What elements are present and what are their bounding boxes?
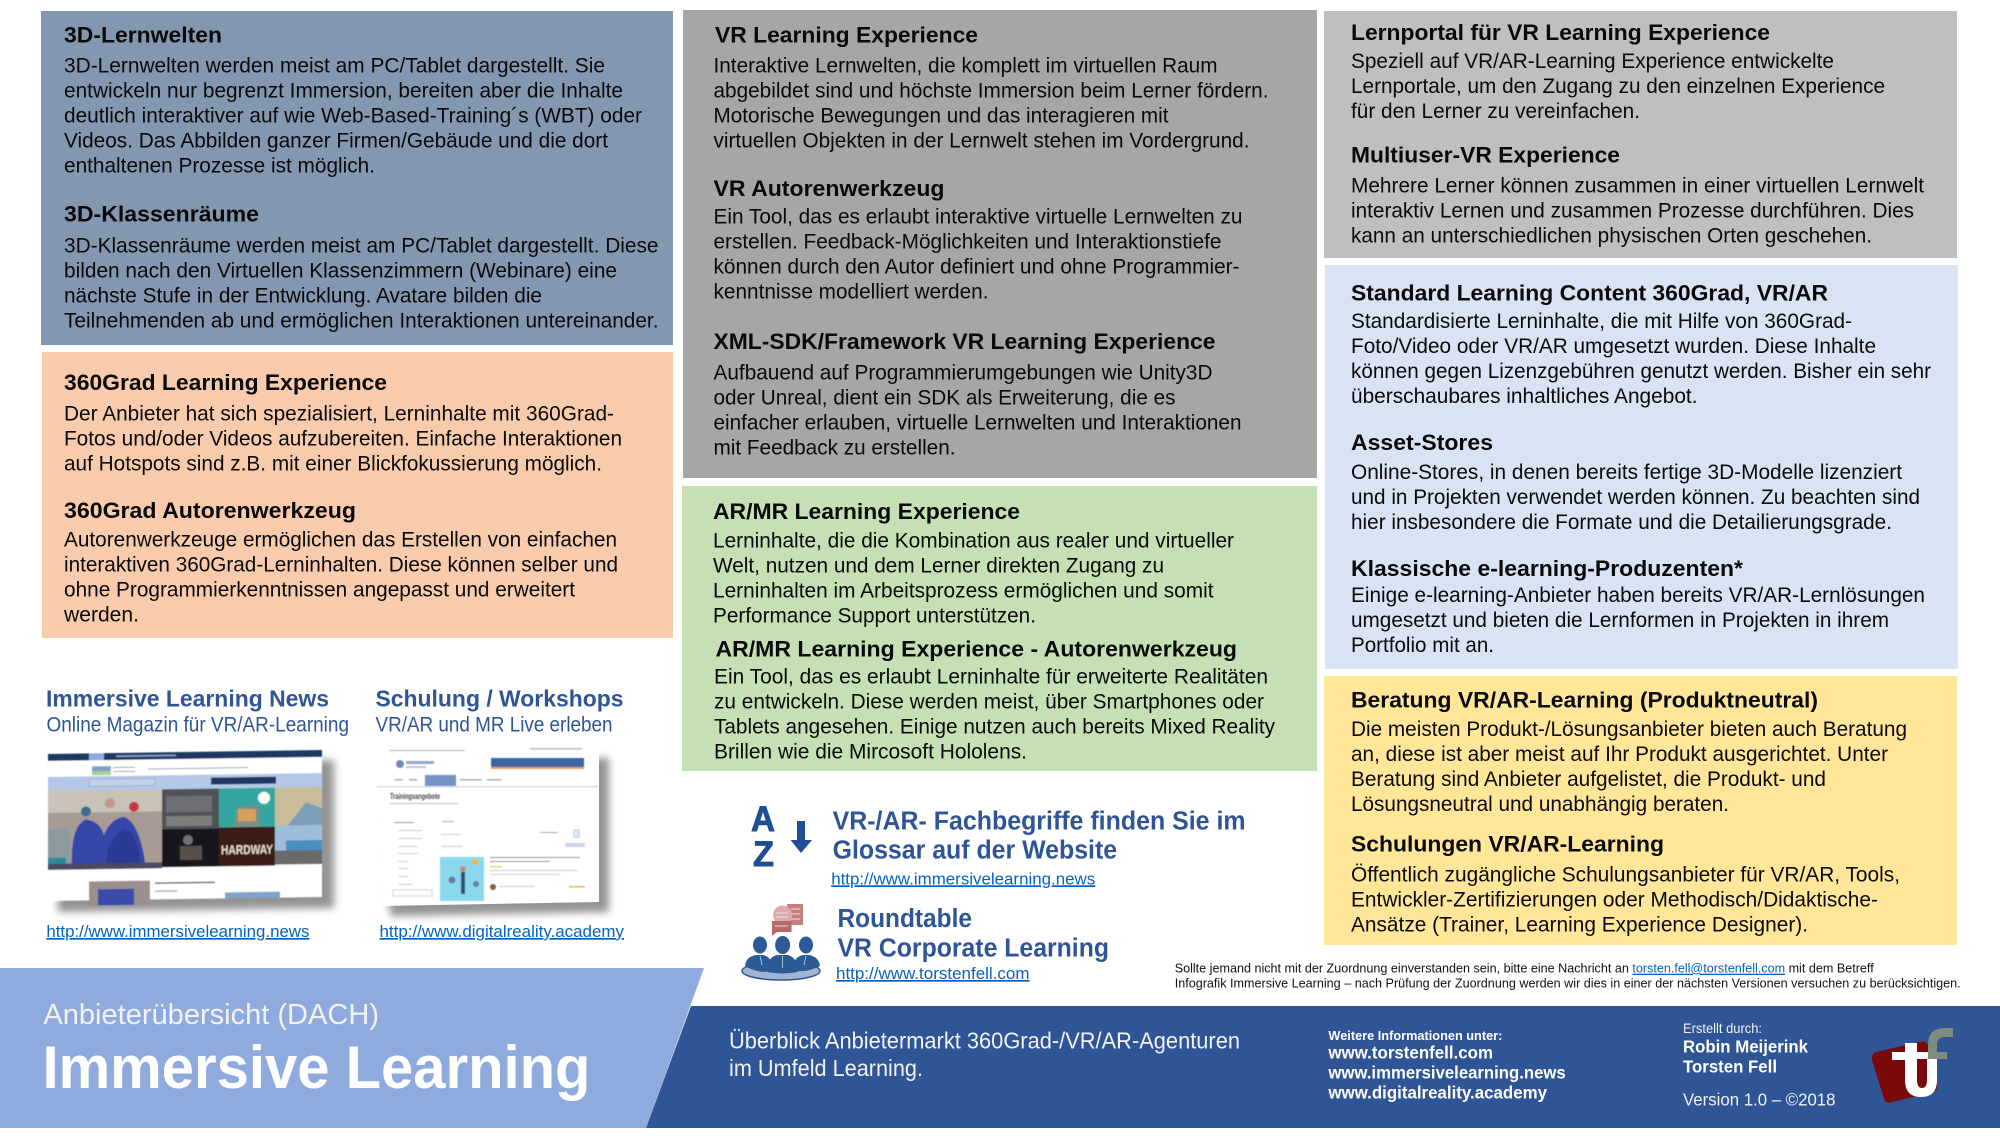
- text: Schulungen description: Ansätze (Trainer, Learning Experience Designer).: [1351, 913, 1808, 937]
- heading: Fachbegriffe Glossar: [833, 807, 1246, 865]
- icon: A-Z sort with arrow: [751, 800, 812, 874]
- text: 360Grad Learning Experience description: auf Hotspots sind z.B. mit einer Blickfokussierung möglich.: [64, 451, 602, 475]
- text: 3D-Klassenräume description: 3D-Klassenräume werden meist am PC/Tablet dargestellt. Diese: [64, 233, 658, 257]
- heading: Fachbegriffe Glossar: VR-/AR- Fachbegriffe finden Sie im: [833, 807, 1246, 835]
- panel: AR/MR: [682, 486, 1317, 771]
- text: AR/MR Learning Experience description: Lerninhalten im Arbeitsprozess ermöglichen und somit: [713, 579, 1214, 603]
- text: 3D-Lernwelten description: 3D-Lernwelten werden meist am PC/Tablet dargestellt. Sie: [64, 53, 605, 77]
- heading: Roundtable VR Corporate Learning: Roundtable: [838, 905, 972, 933]
- footer: authors and version: Robin Meijerink: [1683, 1037, 1808, 1057]
- text: AR/MR Autorenwerkzeug description: Tablets angesehen. Einige nutzen auch bereits Mixed Reality: [714, 714, 1275, 738]
- screenshot: immersivelearning.news website: [48, 750, 334, 912]
- heading: Immersive Learning News: Immersive Learning News: [46, 686, 329, 712]
- panel: 360Grad: [42, 352, 673, 638]
- text: 360Grad Learning Experience description: Der Anbieter hat sich spezialisiert, Lerninhalte mit 360Grad-: [64, 401, 614, 425]
- text: Lernportal description: für den Lerner zu vereinfachen.: [1351, 99, 1640, 123]
- text: XML-SDK/Framework description: einfacher erlauben, virtuelle Lernwelten und Interaktionen: [714, 410, 1242, 434]
- heading: 360Grad Learning Experience: 360Grad Learning Experience: [64, 370, 387, 395]
- footer: further information links: Weitere Informationen unter:: [1328, 1028, 1502, 1043]
- text: 3D-Lernwelten description: deutlich interaktiver auf wie Web-Based-Training´s (WBT) oder: [64, 103, 642, 127]
- heading: Asset-Stores: Asset-Stores: [1351, 430, 1493, 455]
- text: XML-SDK/Framework description: oder Unreal, dient ein SDK als Erweiterung, die es: [714, 385, 1176, 409]
- text: Beratung description: [1351, 717, 1907, 816]
- footer: authors and version: [1683, 1020, 1836, 1110]
- heading: 3D-Lernwelten: 3D-Lernwelten: [64, 23, 222, 48]
- text: Standard Learning Content description: Foto/Video oder VR/AR umgesetzt wurden. Diese Inhalte: [1351, 334, 1876, 358]
- heading: Multiuser-VR Experience: Multiuser-VR Experience: [1351, 143, 1620, 168]
- icon: tf logo: [1872, 1028, 1953, 1103]
- text: Schulungen description: [1351, 863, 1900, 937]
- text: XML-SDK/Framework description: [714, 360, 1242, 459]
- text: e-learning-Produzenten description: umgesetzt und bieten die Lernformen in Projekten in ihrem: [1351, 608, 1889, 632]
- text: Beratung description: Lösungsneutral und unabhängig beraten.: [1351, 792, 1729, 816]
- footer: further information links: www.torstenfell.com: [1327, 1042, 1493, 1062]
- heading: AR/MR Autorenwerkzeug: AR/MR Learning Experience - Autorenwerkzeug: [716, 637, 1237, 662]
- text: VR Learning Experience description: [714, 54, 1268, 152]
- panel: Lernportal and Multiuser: [1324, 11, 1957, 258]
- text: 3D-Lernwelten description: entwickeln nur begrenzt Immersion, bereiten aber die Inhalte: [64, 78, 623, 102]
- subheading: Online Magazin: Online Magazin für VR/AR-Learning: [46, 712, 349, 736]
- text: Standard Learning Content description: überschaubares inhaltliches Angebot.: [1351, 384, 1698, 408]
- text: VR Autorenwerkzeug description: [714, 204, 1242, 303]
- text: VR Autorenwerkzeug description: kenntnisse modelliert werden.: [714, 279, 988, 303]
- text: Asset-Stores description: Online-Stores, in denen bereits fertige 3D-Modelle lizenziert: [1351, 460, 1902, 484]
- footer description: im Umfeld Learning.: [729, 1055, 923, 1081]
- text: VR Learning Experience description: Interaktive Lernwelten, die komplett im virtuellen Raum: [714, 54, 1218, 78]
- subtitle: Anbieterübersicht (DACH): Anbieterübersicht (DACH): [43, 999, 379, 1031]
- text: Lernportal description: [1351, 49, 1885, 123]
- text: 3D-Klassenräume description: Teilnehmenden ab und ermöglichen Interaktionen untereinander.: [64, 308, 658, 332]
- link: torstenfell.com: http://www.torstenfell.com: [836, 964, 1030, 983]
- promo: Immersive Learning News: [46, 686, 349, 941]
- icon: A-Z sort with arrow: A: [751, 800, 775, 839]
- heading: Klassische e-learning-Produzenten: Klassische e-learning-Produzenten*: [1351, 556, 1743, 581]
- footer: further information links: www.digitalreality.academy: [1327, 1082, 1547, 1102]
- text: Schulungen description: Entwickler-Zertifizierungen oder Methodisch/Didaktische-: [1351, 888, 1878, 912]
- note: feedback on classification: Sollte jemand nicht mit der Zuordnung einverstanden sein, bitte eine Nachricht an torsten.fell@torstenfell.com mit dem Betreff: [1175, 961, 1874, 976]
- footer: further information links: www.immersivelearning.news: [1327, 1062, 1566, 1082]
- text: AR/MR Autorenwerkzeug description: zu entwickeln. Diese werden meist, über Smartphones oder: [714, 689, 1264, 713]
- heading: Roundtable VR Corporate Learning: [838, 905, 1109, 963]
- text: 360Grad Learning Experience description: Fotos und/oder Videos aufzubereiten. Einfache Interaktionen: [64, 426, 622, 450]
- footer description: Überblick Anbietermarkt 360Grad-/VR/AR-Agenturen: [729, 1028, 1240, 1054]
- text: 3D-Klassenräume description: nächste Stufe in der Entwicklung. Avatare bilden die: [64, 283, 542, 307]
- text: Asset-Stores description: hier insbesondere die Formate und die Detailierungsgrade.: [1351, 510, 1892, 534]
- heading: Schulung / Workshops: Schulung / Workshops: [376, 686, 624, 712]
- footer: authors and version: Version 1.0 – ©2018: [1683, 1090, 1836, 1110]
- text: AR/MR Autorenwerkzeug description: [714, 664, 1275, 763]
- text: Multiuser description: [1351, 173, 1924, 247]
- text: 360Grad Autorenwerkzeug description: werden.: [63, 602, 139, 626]
- text: Standard Learning Content description: können gegen Lizenzgebühren genutzt werden. Bisher ein sehr: [1351, 359, 1931, 383]
- text: e-learning-Produzenten description: Einige e-learning-Anbieter haben bereits VR/AR-Lernlösungen: [1351, 583, 1925, 607]
- heading: VR Learning Experience: VR Learning Experience: [715, 23, 978, 48]
- text: VR Autorenwerkzeug description: können durch den Autor definiert und ohne Programmier-: [714, 254, 1240, 278]
- footer: authors and version: Erstellt durch:: [1683, 1020, 1762, 1036]
- text: VR Learning Experience description: Motorische Bewegungen und das interagieren mit: [714, 103, 1169, 127]
- text: Lernportal description: Lernportale, um den Zugang zu den einzelnen Experience: [1351, 74, 1885, 98]
- icon: A-Z sort with arrow: Z: [753, 835, 774, 874]
- link: glossary website: http://www.immersivelearning.news: [831, 869, 1095, 888]
- footer band: dark blue: [646, 1006, 2000, 1128]
- text: Asset-Stores description: und in Projekten verwendet werden können. Zu beachten sind: [1351, 485, 1920, 509]
- screenshot: immersivelearning.news website: HARDWAY: [221, 842, 273, 857]
- text: Multiuser description: kann an unterschiedlichen physischen Orten geschehen.: [1351, 223, 1872, 247]
- text: XML-SDK/Framework description: mit Feedback zu erstellen.: [714, 435, 956, 459]
- text: Multiuser description: interaktiv Lernen und zusammen Prozesse durchführen. Dies: [1351, 198, 1914, 222]
- heading: XML-SDK/Framework VR Learning Experience: XML-SDK/Framework VR Learning Experience: [714, 329, 1216, 354]
- heading: Lernportal für VR Learning Experience: Lernportal für VR Learning Experience: [1351, 20, 1770, 45]
- panel: 3D-Lernwelten and 3D-Klassenräume: [41, 11, 673, 345]
- text: 360Grad Autorenwerkzeug description: Autorenwerkzeuge ermöglichen das Erstellen von einfachen: [64, 527, 617, 551]
- text: AR/MR Learning Experience description: [713, 529, 1234, 628]
- text: AR/MR Learning Experience description: Welt, nutzen und dem Lerner direkten Zugang zu: [713, 554, 1164, 578]
- note: feedback on classification: [1175, 961, 1961, 990]
- text: 360Grad Learning Experience description: [64, 401, 622, 475]
- text: e-learning-Produzenten description: [1351, 583, 1925, 657]
- heading: Standard Learning Content: Standard Learning Content 360Grad, VR/AR: [1351, 281, 1828, 306]
- heading: VR Autorenwerkzeug: VR Autorenwerkzeug: [714, 176, 944, 201]
- text: XML-SDK/Framework description: Aufbauend auf Programmierumgebungen wie Unity3D: [714, 360, 1212, 384]
- icon: roundtable people with speech bubbles: [742, 904, 820, 980]
- text: Beratung description: Die meisten Produkt-/Lösungsanbieter bieten auch Beratung: [1351, 717, 1907, 741]
- text: Multiuser description: Mehrere Lerner können zusammen in einer virtuellen Lernwelt: [1351, 173, 1924, 197]
- promo: Schulung / Workshops: [376, 686, 624, 941]
- panel: Standard content, assets, producers: [1325, 265, 1958, 669]
- text: VR Autorenwerkzeug description: erstellen. Feedback-Möglichkeiten und Interaktionstiefe: [714, 229, 1222, 253]
- text: Asset-Stores description: [1351, 460, 1920, 534]
- heading: Schulungen VR/AR-Learning: Schulungen VR/AR-Learning: [1351, 832, 1664, 857]
- text: VR Learning Experience description: abgebildet sind und höchste Immersion beim Lerner fördern.: [714, 78, 1268, 102]
- glossary callout: [831, 807, 1246, 888]
- heading: Beratung VR/AR-Learning: Beratung VR/AR-Learning (Produktneutral): [1351, 687, 1818, 712]
- title banner: [0, 968, 704, 1128]
- text: Beratung description: Beratung sind Anbieter aufgelistet, die Produkt- und: [1351, 767, 1826, 791]
- footer: authors and version: Torsten Fell: [1683, 1057, 1777, 1077]
- text: AR/MR Autorenwerkzeug description: Brillen wie die Mircosoft Hololens.: [714, 739, 1027, 763]
- text: Lernportal description: Speziell auf VR/AR-Learning Experience entwickelte: [1351, 49, 1834, 73]
- text: e-learning-Produzenten description: Portfolio mit an.: [1351, 633, 1494, 657]
- text: 3D-Lernwelten description: Videos. Das Abbilden ganzer Firmen/Gebäude und die dort: [64, 128, 608, 152]
- footer: further information links: [1327, 1028, 1566, 1102]
- text: 360Grad Autorenwerkzeug description: interaktiven 360Grad-Lerninhalten. Diese können selber und: [64, 552, 618, 576]
- heading: 360Grad Autorenwerkzeug: 360Grad Autorenwerkzeug: [64, 498, 356, 523]
- footer description: [729, 1028, 1240, 1081]
- screenshot: digitalreality.academy website: [377, 747, 609, 916]
- link: digitalreality.academy: http://www.digitalreality.academy: [380, 922, 624, 941]
- text: 3D-Lernwelten description: [64, 53, 642, 177]
- panel: VR: [683, 10, 1317, 478]
- heading: 3D-Klassenräume: 3D-Klassenräume: [64, 202, 259, 227]
- text: AR/MR Autorenwerkzeug description: Ein Tool, das es erlaubt Lerninhalte für erweiterte Realitäten: [714, 664, 1268, 688]
- heading: Roundtable VR Corporate Learning: VR Corporate Learning: [838, 935, 1109, 963]
- heading: Fachbegriffe Glossar: Glossar auf der Website: [833, 837, 1117, 865]
- heading: AR/MR Learning Experience: AR/MR Learning Experience: [713, 499, 1020, 524]
- text: 360Grad Autorenwerkzeug description: ohne Programmierkenntnissen angepasst und erweitert: [64, 577, 575, 601]
- note: feedback on classification: Infografik Immersive Learning – nach Prüfung der Zuordnung werden wir dies in einer der nächsten Versionen versuchen zu berücksichtigen.: [1175, 975, 1961, 990]
- link: immersivelearning.news: http://www.immersivelearning.news: [46, 922, 309, 941]
- text: AR/MR Learning Experience description: Lerninhalte, die die Kombination aus realer und virtueller: [713, 529, 1234, 553]
- text: Schulungen description: Öffentlich zugängliche Schulungsanbieter für VR/AR, Tools,: [1351, 863, 1900, 887]
- title: Immersive Learning: Immersive Learning: [42, 1034, 590, 1101]
- text: 3D-Klassenräume description: bilden nach den Virtuellen Klassenzimmern (Webinare) eine: [64, 258, 617, 282]
- text: 360Grad Autorenwerkzeug description: [63, 527, 618, 626]
- text: 3D-Lernwelten description: enthaltenen Prozesse ist möglich.: [64, 153, 375, 177]
- subheading: VR/AR und MR Live erleben: VR/AR und MR Live erleben: [376, 712, 612, 736]
- panel: Beratung and Schulungen: [1324, 676, 1957, 945]
- text: VR Autorenwerkzeug description: Ein Tool, das es erlaubt interaktive virtuelle Lernwelten zu: [714, 204, 1242, 228]
- text: AR/MR Learning Experience description: Performance Support unterstützen.: [713, 604, 1036, 628]
- text: 3D-Klassenräume description: [64, 233, 658, 332]
- roundtable callout: [836, 905, 1109, 983]
- text: Beratung description: an, diese ist aber meist auf Ihr Produkt ausgerichtet. Unter: [1351, 742, 1888, 766]
- text: Standard Learning Content description: Standardisierte Lerninhalte, die mit Hilfe von 360Grad-: [1351, 309, 1852, 333]
- screenshot: digitalreality.academy website: Trainingsangebote: [390, 792, 440, 801]
- text: VR Learning Experience description: virtuellen Objekten in der Lernwelt stehen im Vordergrund.: [714, 128, 1250, 152]
- text: Standard Learning Content description: [1351, 309, 1931, 408]
